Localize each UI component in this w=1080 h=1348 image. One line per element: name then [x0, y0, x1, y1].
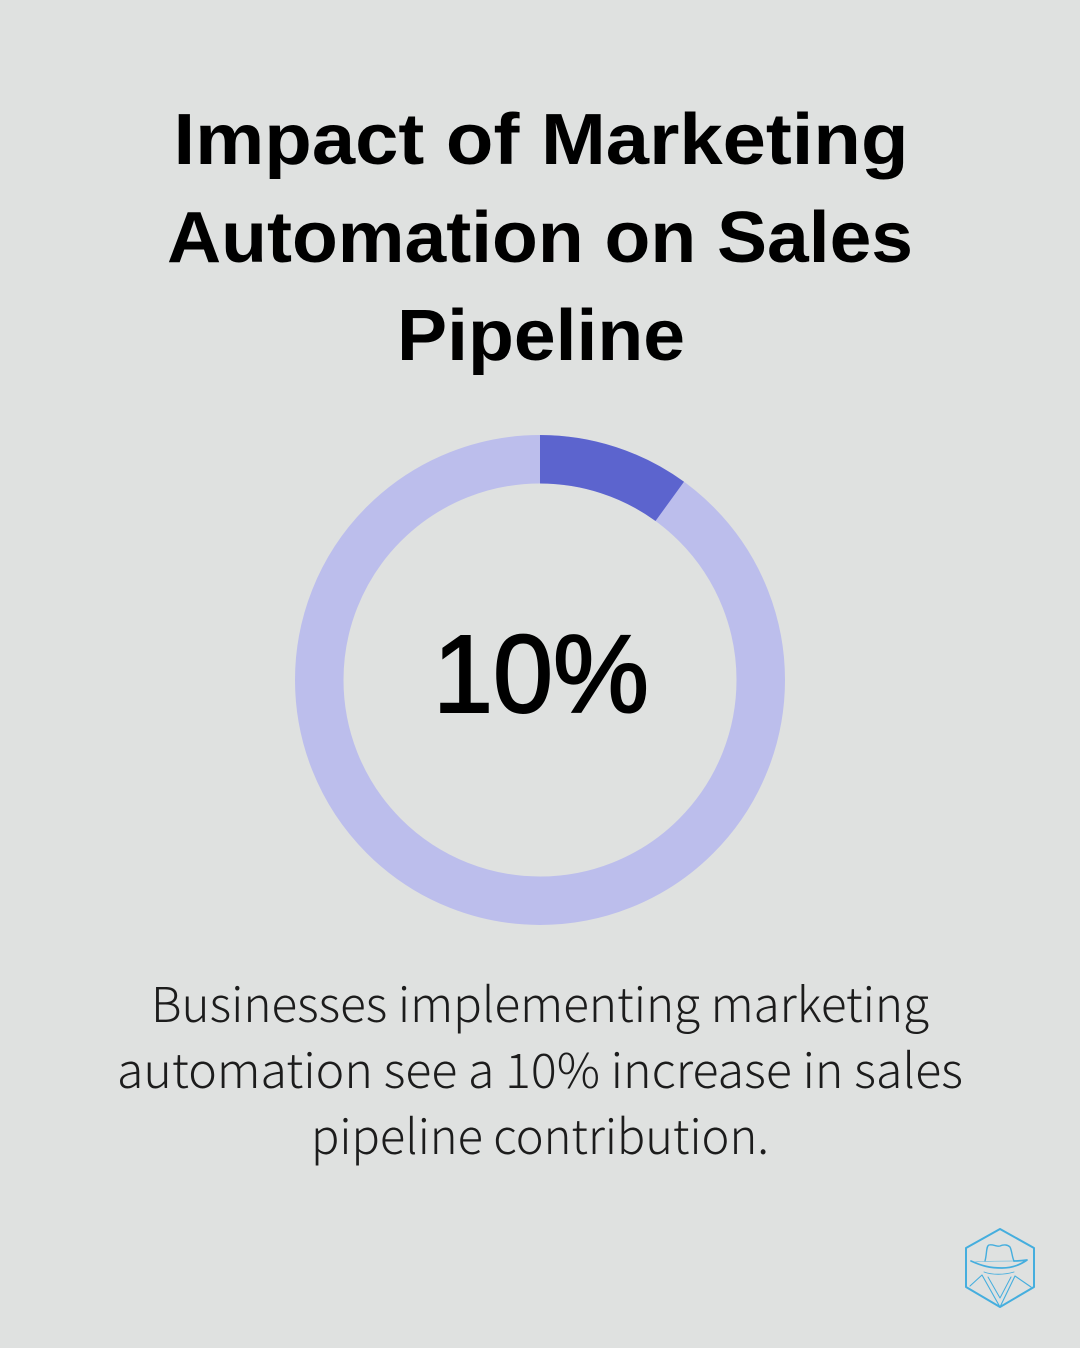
title: Automation on Sales — [167, 198, 913, 278]
center value: 10% — [433, 613, 649, 736]
title: Impact of Marketing — [174, 100, 908, 180]
title — [167, 100, 913, 376]
title: Pipeline — [397, 296, 685, 376]
donut track — [319, 459, 761, 901]
description: pipeline contribution. — [311, 1098, 769, 1168]
donut chart — [319, 435, 761, 901]
description — [117, 966, 963, 1168]
description: Businesses implementing marketing — [151, 966, 929, 1036]
donut segment: 10% — [540, 435, 684, 521]
icon: hexagon spy logo — [966, 1229, 1034, 1307]
description: automation see a 10% increase in sales — [117, 1032, 963, 1102]
